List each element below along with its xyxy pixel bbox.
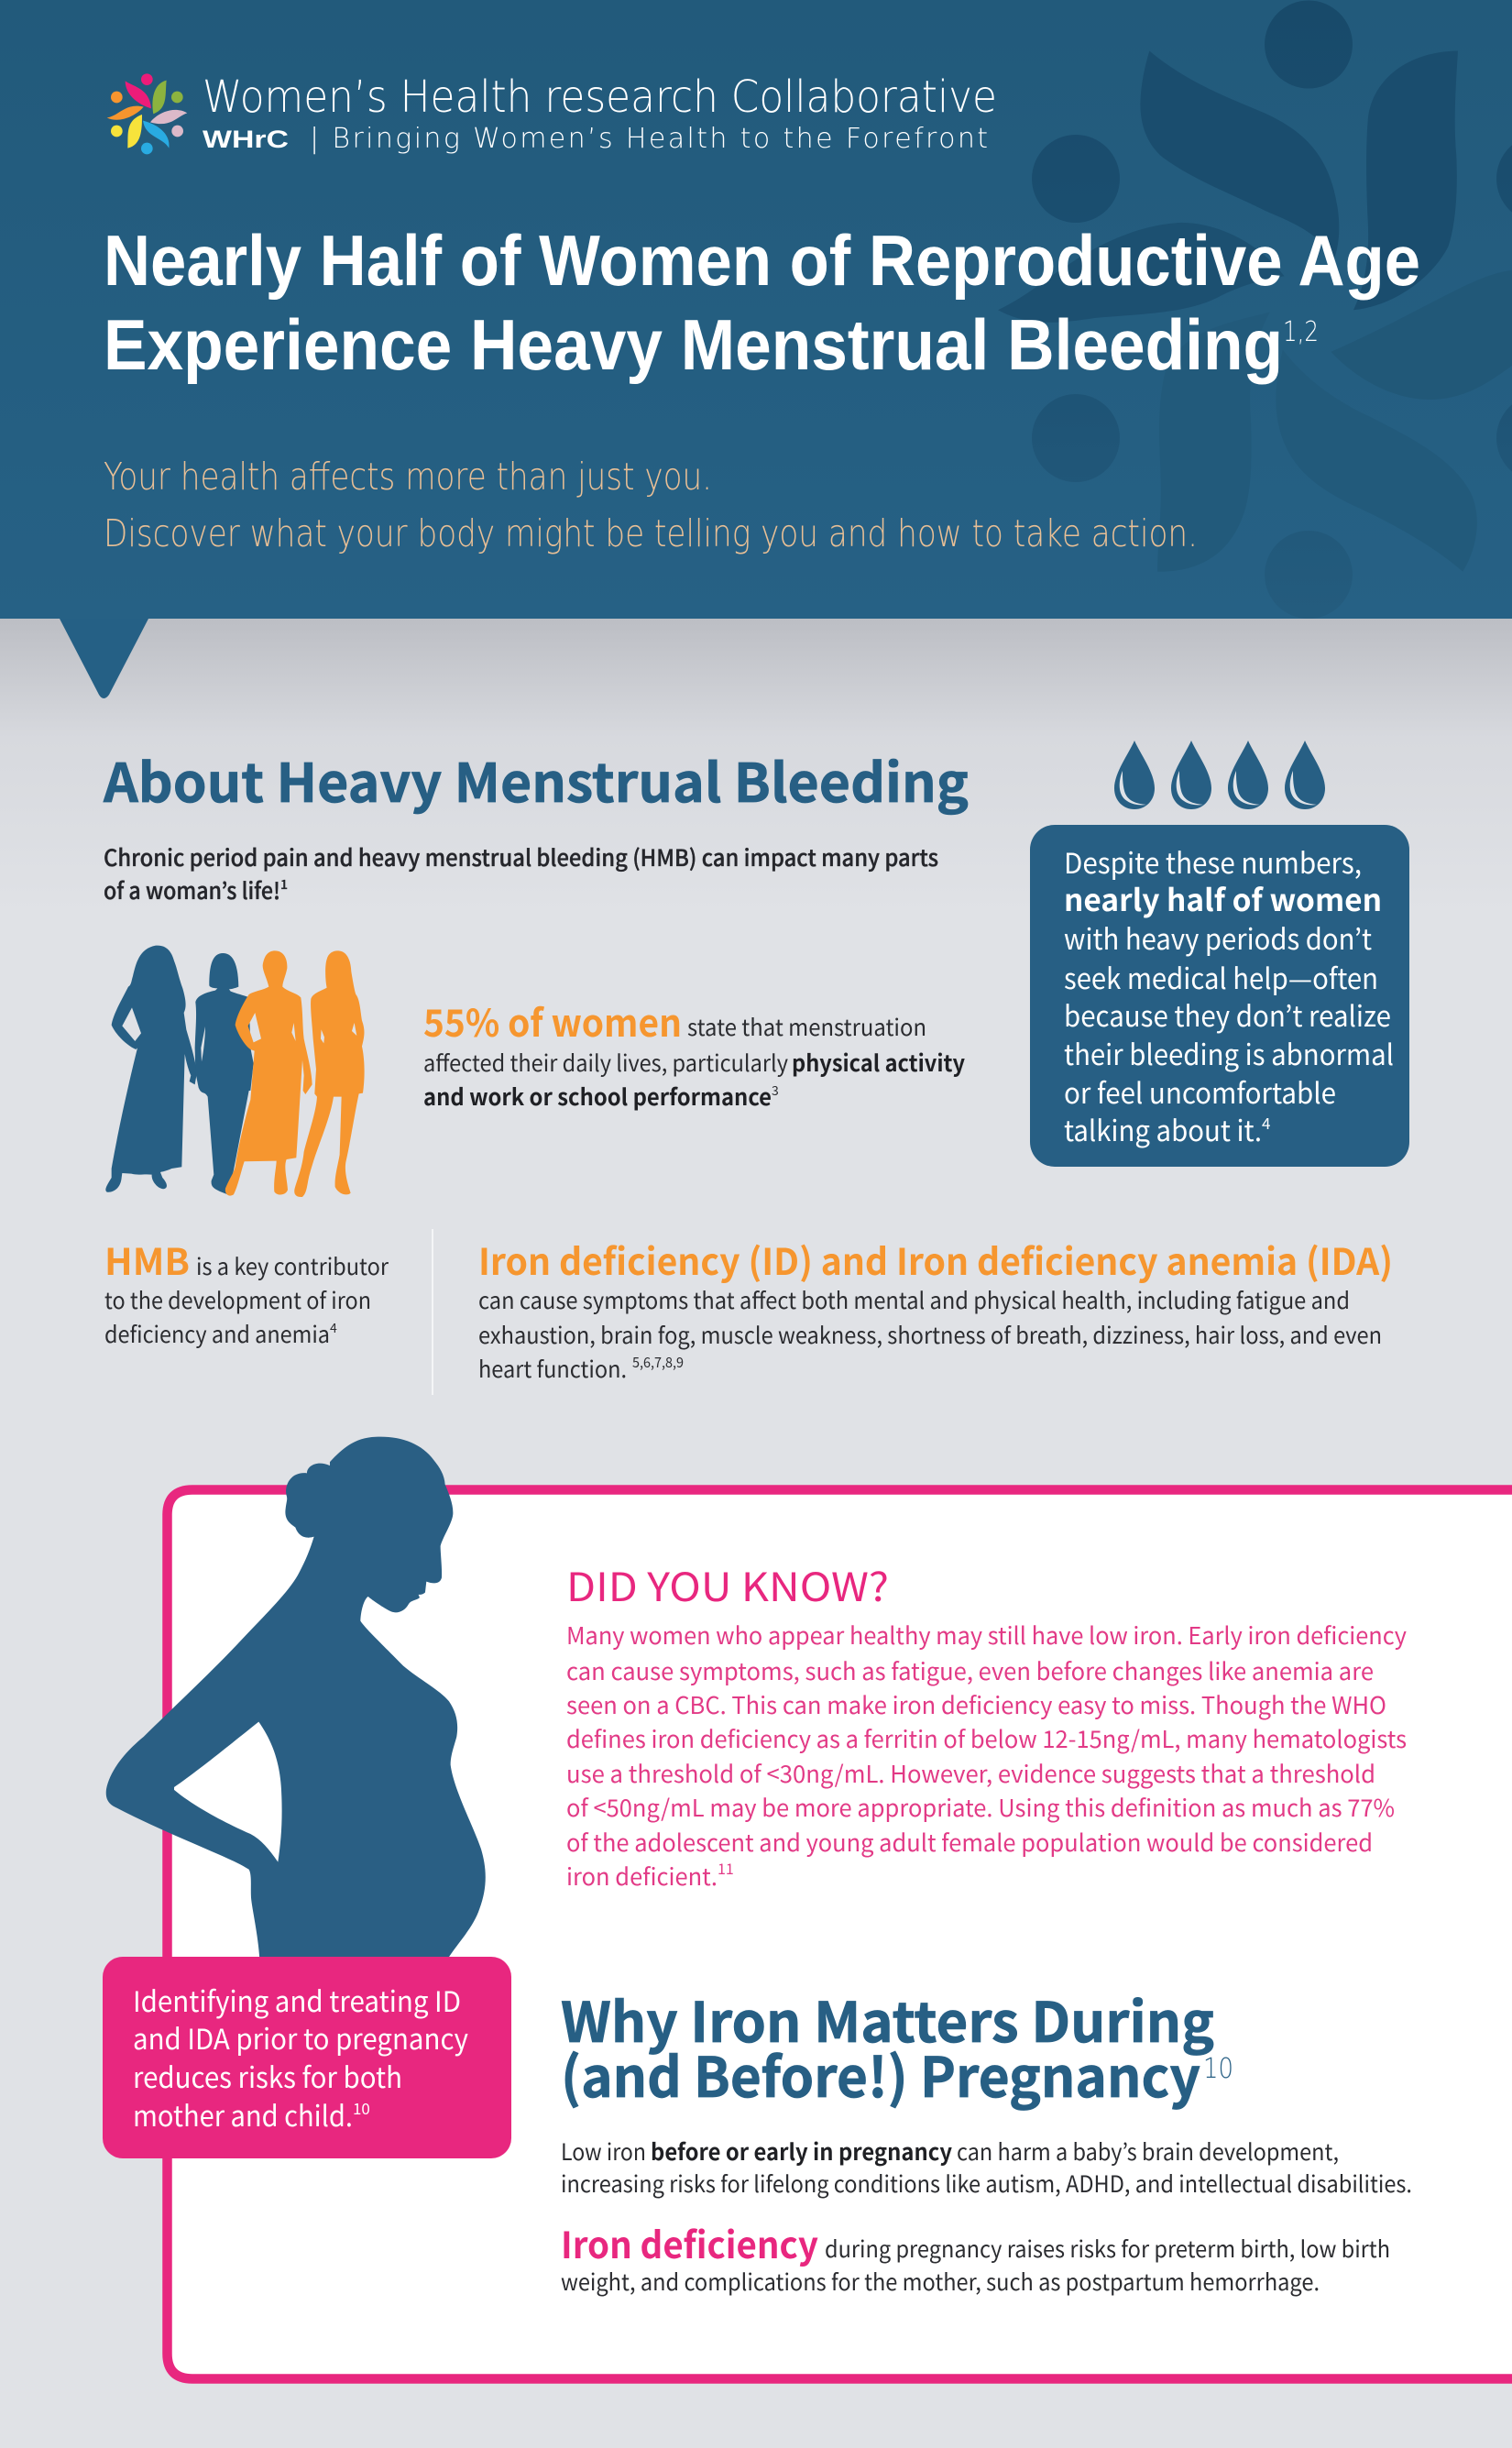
icon: WHrC logo [107,73,187,154]
callout: treating ID and IDA: 10 [353,2096,370,2119]
callout: nearly half of women: seek medical help—often [1064,956,1378,997]
callout: nearly half of women [1030,825,1409,1167]
heading: why iron matters: (and Before!) Pregnancy [561,2034,1200,2113]
callout: treating ID and IDA: mother and child. [133,2093,353,2135]
watermark logo [998,0,1512,619]
title: 1,2 [1283,316,1319,348]
intro text [104,840,938,906]
pointer tail [60,619,148,698]
text: iron deficiency during pregnancy [561,2216,1390,2298]
callout: treating ID and IDA [103,1957,511,2158]
callout: nearly half of women: Despite these numbers, [1064,840,1362,882]
callout: treating ID and IDA: Identifying and treating ID [133,1979,461,2020]
text: did you know: can cause symptoms, such as fatigue, even before changes like anemia are [566,1653,1374,1687]
text: did you know [566,1556,1407,1893]
stat: 55% of women: and work or school performance [423,1080,772,1113]
subtitle: Discover what your body might be telling you and how to take action. [104,511,1198,555]
stat: 55% of women: 55% of women [423,993,682,1048]
heading: why iron matters: 10 [1203,2053,1233,2085]
text: iron deficiency during pregnancy: during pregnancy raises risks for preterm birth, low birth [825,2232,1390,2265]
callout: nearly half of women: with heavy periods don’t [1064,917,1372,958]
icon: four women silhouettes [105,946,365,1197]
stat: 55% of women: physical activity [792,1046,966,1079]
text: did you know: DID YOU KNOW? [566,1556,889,1613]
text: HMB contributor: deficiency and anemia [104,1317,330,1350]
heading: why iron matters [561,1979,1233,2113]
text: HMB contributor: is a key contributor [196,1249,389,1282]
text: iron deficiency symptoms: 5,6,7,8,9 [632,1353,684,1372]
heading: why iron matters: Why Iron Matters During [561,1979,1214,2058]
text: low iron: can harm a baby’s brain development, [957,2135,1339,2168]
organisation name: WHrC [203,126,289,153]
text: did you know: use a threshold of <30ng/mL. However, evidence suggests that a threshold [566,1756,1375,1790]
subtitle [104,455,1198,555]
text: did you know: seen on a CBC. This can make iron deficiency easy to miss. Though the WHO [566,1687,1386,1721]
intro text: 1 [280,875,288,894]
intro text: Chronic period pain and heavy menstrual bleeding (HMB) can impact many parts [104,840,938,873]
icon: pregnant woman silhouette [106,1437,486,1959]
callout: nearly half of women: talking about it. [1064,1108,1262,1149]
panel: pregnancy frame [167,1490,1512,2379]
text: did you know: 11 [718,1857,734,1879]
text: did you know: iron deficient. [566,1859,718,1893]
callout: nearly half of women: because they don’t realize [1064,993,1391,1035]
callout: nearly half of women: nearly half of women [1064,876,1382,920]
text: iron deficiency symptoms: Iron deficiency (ID) and Iron deficiency anemia (IDA) [478,1233,1393,1286]
callout: nearly half of women: or feel uncomfortable [1064,1070,1336,1112]
callout: nearly half of women: 4 [1262,1111,1270,1134]
text: HMB contributor: 4 [330,1319,337,1337]
text: did you know: defines iron deficiency as a ferritin of below 12-15ng/mL, many hematologists [566,1721,1407,1755]
text: iron deficiency symptoms: heart function. [478,1352,627,1385]
stat: 55% of women [423,993,966,1113]
text: did you know: of <50ng/mL may be more appropriate. Using this definition as much as 77% [566,1790,1395,1824]
callout: treating ID and IDA: reduces risks for both [133,2055,402,2096]
organisation name: Women’s Health research Collaborative [203,71,997,123]
callout: treating ID and IDA: and IDA prior to pregnancy [133,2016,468,2058]
text: iron deficiency symptoms: exhaustion, brain fog, muscle weakness, shortness of breath, dizziness, hair loss, and even [478,1318,1382,1351]
text: iron deficiency during pregnancy: Iron deficiency [561,2216,818,2269]
stat: 55% of women: 3 [772,1081,779,1100]
title [104,220,1420,385]
text: did you know: of the adolescent and young adult female population would be considered [566,1825,1373,1859]
text: low iron: Low iron [561,2135,646,2168]
text: low iron: before or early in pregnancy [651,2135,953,2168]
heading: about HMB: About Heavy Menstrual Bleeding [103,741,969,818]
text: low iron [561,2135,1412,2200]
stat: 55% of women: state that menstruation [687,1010,926,1043]
organisation name: | Bringing Women’s Health to the Forefront [310,123,988,155]
organisation name [203,71,997,155]
subtitle: Your health affects more than just you. [104,455,712,499]
text: did you know: Many women who appear healthy may still have low iron. Early iron deficiency [566,1618,1407,1652]
text: iron deficiency symptoms [478,1233,1393,1385]
title: Experience Heavy Menstrual Bleeding [104,304,1283,385]
callout: nearly half of women: their bleeding is abnormal [1064,1032,1394,1073]
text: HMB contributor [104,1233,389,1350]
text: HMB contributor: to the development of iron [104,1283,371,1316]
intro text: of a woman’s life! [104,873,280,906]
icon: four blood drops [1114,741,1325,809]
text: iron deficiency during pregnancy: weight, and complications for the mother, such as postpartum hemorrhage. [561,2265,1320,2298]
header banner [0,0,1512,698]
stat: 55% of women: affected their daily lives, particularly [423,1046,788,1079]
text: iron deficiency symptoms: can cause symptoms that affect both mental and physical health, including fatigue and [478,1283,1350,1316]
text: low iron: increasing risks for lifelong conditions like autism, ADHD, and intellectual disabilities. [561,2167,1412,2200]
text: HMB contributor: HMB [104,1233,190,1286]
